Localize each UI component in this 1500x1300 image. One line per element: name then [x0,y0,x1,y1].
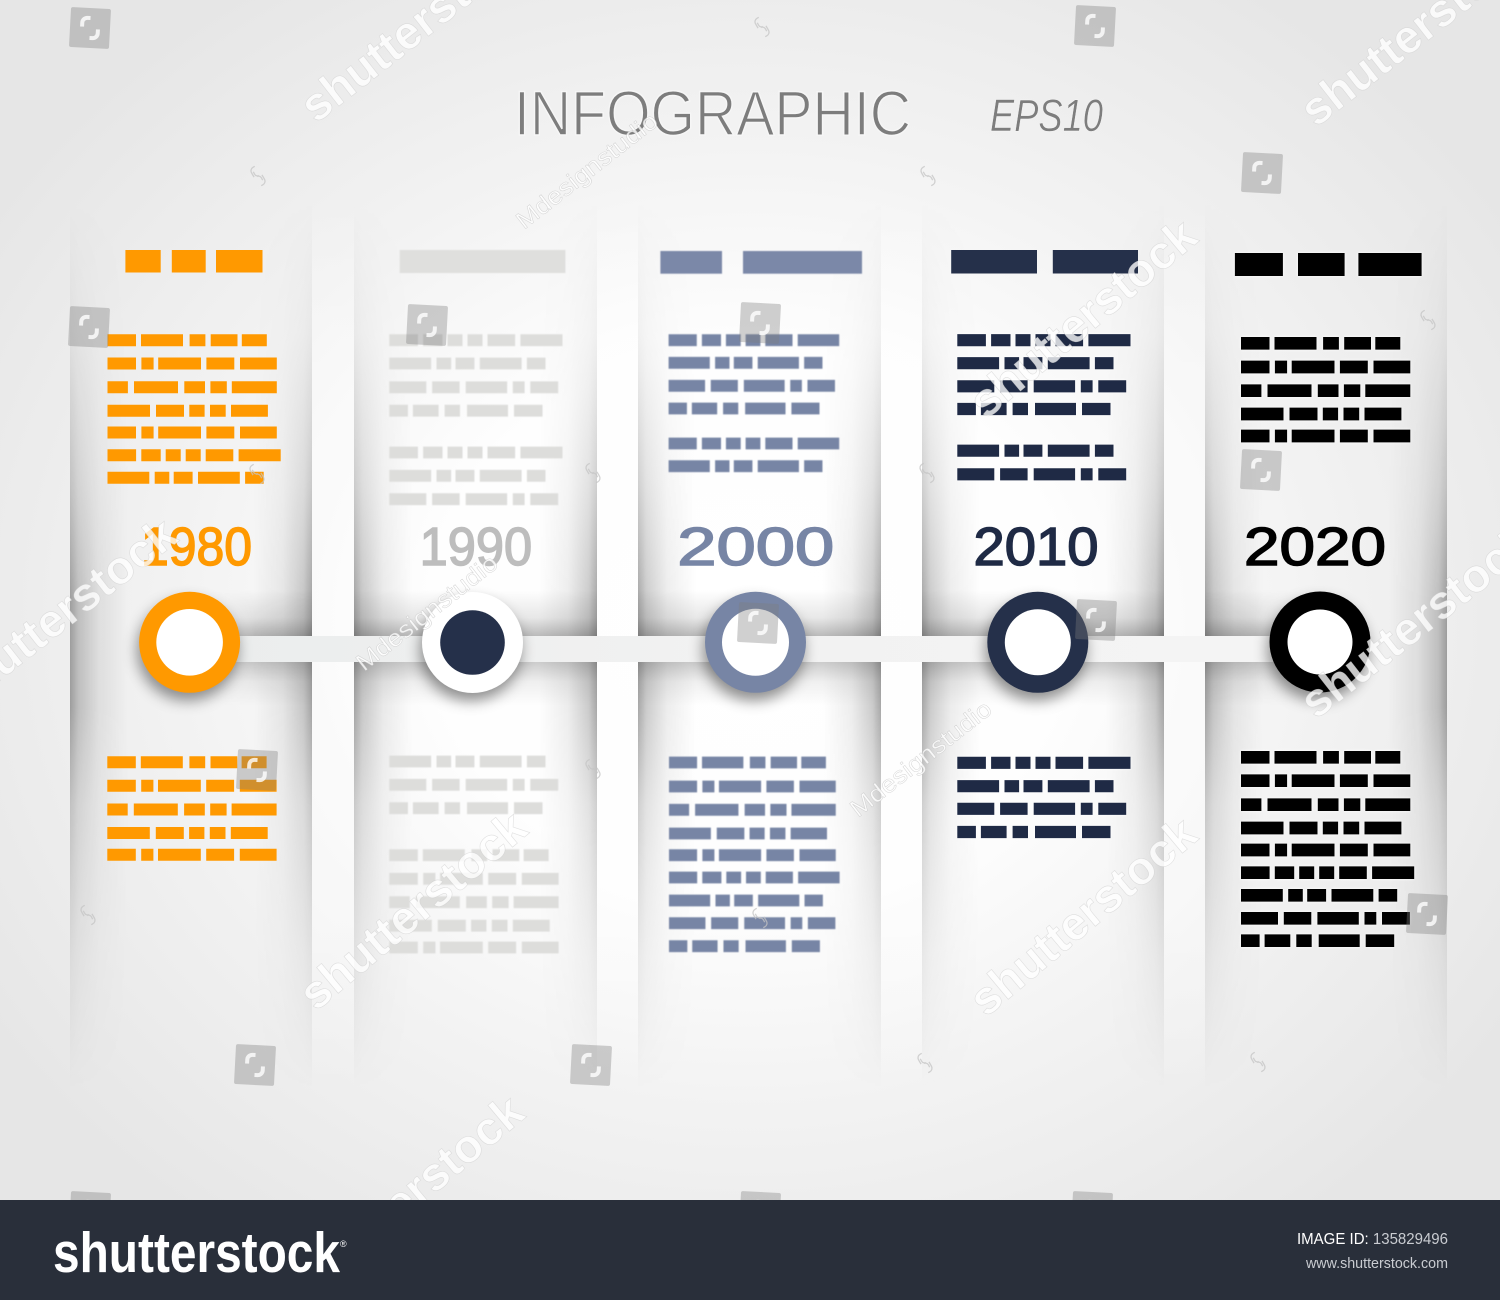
timeline node: 2000 [705,592,806,693]
year: 2000: 2000 [677,517,834,577]
heading bar: 1990 [400,250,565,273]
panel: 1990 [354,200,597,1090]
text block: 1990 top [389,340,562,499]
stock watermark overlay: Mdesignstudio [351,550,503,677]
stock watermark overlay: Mdesignstudio [845,696,997,823]
timeline node: 1990 [422,592,523,693]
timeline band [230,636,1270,662]
timeline node: 1980 [139,592,240,693]
stock watermark overlay: shutterstock [289,800,536,1020]
text block: 2020 top [1241,343,1410,436]
footer bar [0,1200,1500,1300]
text block: 2000 bottom [669,762,840,946]
heading bars: 2020 [1235,253,1422,276]
panel: 2010 [922,200,1164,1090]
stock watermark overlay: shutterstock [286,1084,533,1300]
subtitle: EPS10 [990,90,1103,141]
year: 2010: 2010 [974,517,1098,577]
panel shading [70,296,1447,1024]
heading bars: 2000 [660,251,862,274]
footer site url: www.shutterstock.com [1305,1256,1448,1272]
timeline node: 2020 [1270,592,1370,692]
timeline node: 2010 [987,592,1088,693]
year: 1990: 1990 [420,517,532,577]
panel: 1980 [70,200,312,1090]
footer logo wordmark: shutterstock [53,1221,340,1285]
text block: 1980 top [108,340,281,478]
heading bars: 2010 [951,250,1138,274]
stock watermark overlay: shutterstock [959,806,1206,1026]
text block: 2020 bottom [1241,757,1414,941]
footer registered mark: ® [340,1239,347,1249]
heading bars: 1980 [125,250,263,272]
text block: 2010 bottom [957,763,1130,832]
footer image id: IMAGE ID: 135829496 [1297,1231,1448,1248]
stock watermark overlay: shutterstock [959,208,1206,428]
title: INFOGRAPHIC [514,79,911,149]
year: 2020: 2020 [1244,517,1386,577]
text block: 1990 bottom [389,762,559,948]
text block: 2010 top [957,340,1130,474]
text block: 1980 bottom [107,762,277,855]
text block: 2000 top [669,340,839,466]
year: 1980: 1980 [141,517,252,577]
panel: 2020 [1205,200,1447,1090]
stock watermark overlay: Mdesignstudio [511,108,663,235]
panel: 2000 [638,200,881,1090]
